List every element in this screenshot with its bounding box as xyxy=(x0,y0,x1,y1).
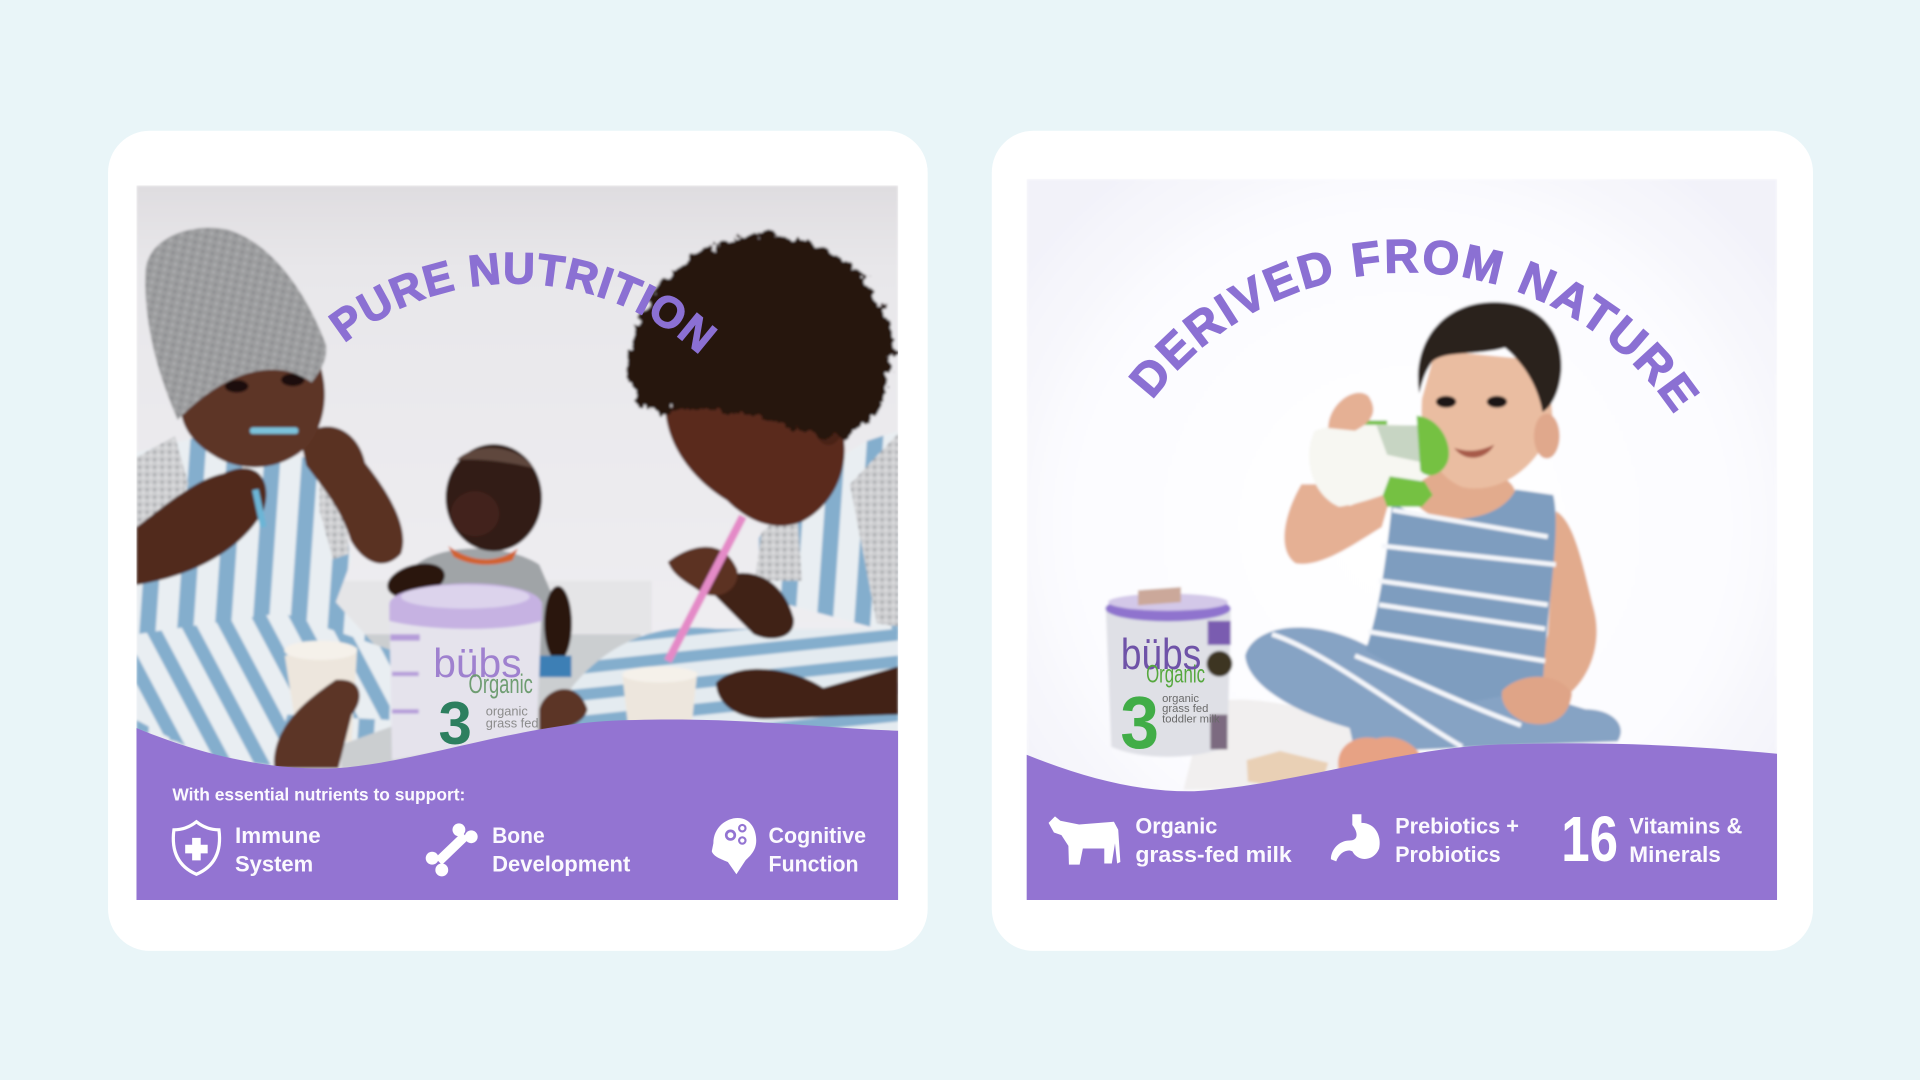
benefit: 16 vitamins and minerals: Minerals xyxy=(1629,842,1721,867)
benefit: cognitive function xyxy=(712,818,866,877)
benefit: prebiotics and probiotics: Prebiotics + xyxy=(1395,814,1519,839)
benefit: immune system: Immune xyxy=(235,823,321,848)
tin label text: toddler milk xyxy=(1162,714,1220,726)
benefit: 16 vitamins and minerals: Vitamins & xyxy=(1629,814,1742,839)
benefit: bone development: Development xyxy=(492,852,631,877)
tin label text: organic xyxy=(1162,693,1199,705)
benefit: prebiotics and probiotics xyxy=(1331,814,1519,867)
benefit: 16 vitamins and minerals: 16 xyxy=(1561,803,1618,875)
subheading: With essential nutrients to support: xyxy=(172,784,465,804)
tin label text: 3 xyxy=(439,690,472,757)
icon: shield xyxy=(173,822,220,874)
heading: pure nutrition: PURE NUTRITION xyxy=(328,252,718,354)
tin label text xyxy=(436,648,538,744)
wave banner xyxy=(136,720,898,900)
benefit: cognitive function: Function xyxy=(769,852,859,877)
tin label text: bübs xyxy=(1121,630,1201,679)
toddler xyxy=(1245,302,1621,771)
photo: toddler with bottle and formula tin xyxy=(1027,179,1777,900)
heading: derived from nature: DERIVED FROM NATURE xyxy=(1128,239,1700,414)
tin label text: 3 xyxy=(1120,681,1159,764)
benefit: immune system: System xyxy=(235,852,313,877)
tin label text: grass fed xyxy=(1162,703,1208,715)
benefit: bone development: Bone xyxy=(492,823,545,848)
tin label text xyxy=(1122,638,1220,749)
benefit: organic grass-fed milk: grass-fed milk xyxy=(1135,842,1293,867)
benefit: bone development xyxy=(426,823,631,877)
benefit: prebiotics and probiotics: Probiotics xyxy=(1395,842,1501,867)
icon: cow xyxy=(1049,816,1120,865)
tin label text: organic xyxy=(486,704,528,719)
benefit: organic grass-fed milk xyxy=(1049,814,1293,867)
icon: bone xyxy=(426,823,478,876)
photo: two toddlers with doll and formula tin xyxy=(136,185,898,900)
benefit: immune system xyxy=(173,822,321,877)
sippy bottle xyxy=(1309,393,1449,507)
right toddler xyxy=(539,235,898,731)
wave banner xyxy=(1027,743,1777,900)
tin label text: grass fed xyxy=(486,715,539,730)
card background xyxy=(108,131,928,951)
wooden block xyxy=(1247,751,1328,787)
icon: stomach xyxy=(1331,814,1380,861)
benefit: organic grass-fed milk: Organic xyxy=(1135,814,1217,839)
benefit: 16 vitamins and minerals xyxy=(1561,803,1742,875)
formula tin xyxy=(1105,587,1232,757)
icon: head with gears xyxy=(712,818,756,874)
formula tin xyxy=(389,583,542,760)
tin label text: Organic xyxy=(1146,661,1205,688)
doll xyxy=(383,444,572,677)
left toddler xyxy=(136,228,403,768)
panel: derived from nature xyxy=(992,130,1813,951)
benefit: cognitive function: Cognitive xyxy=(769,823,866,848)
card background xyxy=(992,131,1813,951)
curly hair xyxy=(630,235,893,438)
panel: pure nutrition xyxy=(108,130,928,951)
tin label text: Organic xyxy=(469,669,533,699)
tin label text: bübs xyxy=(433,640,522,686)
